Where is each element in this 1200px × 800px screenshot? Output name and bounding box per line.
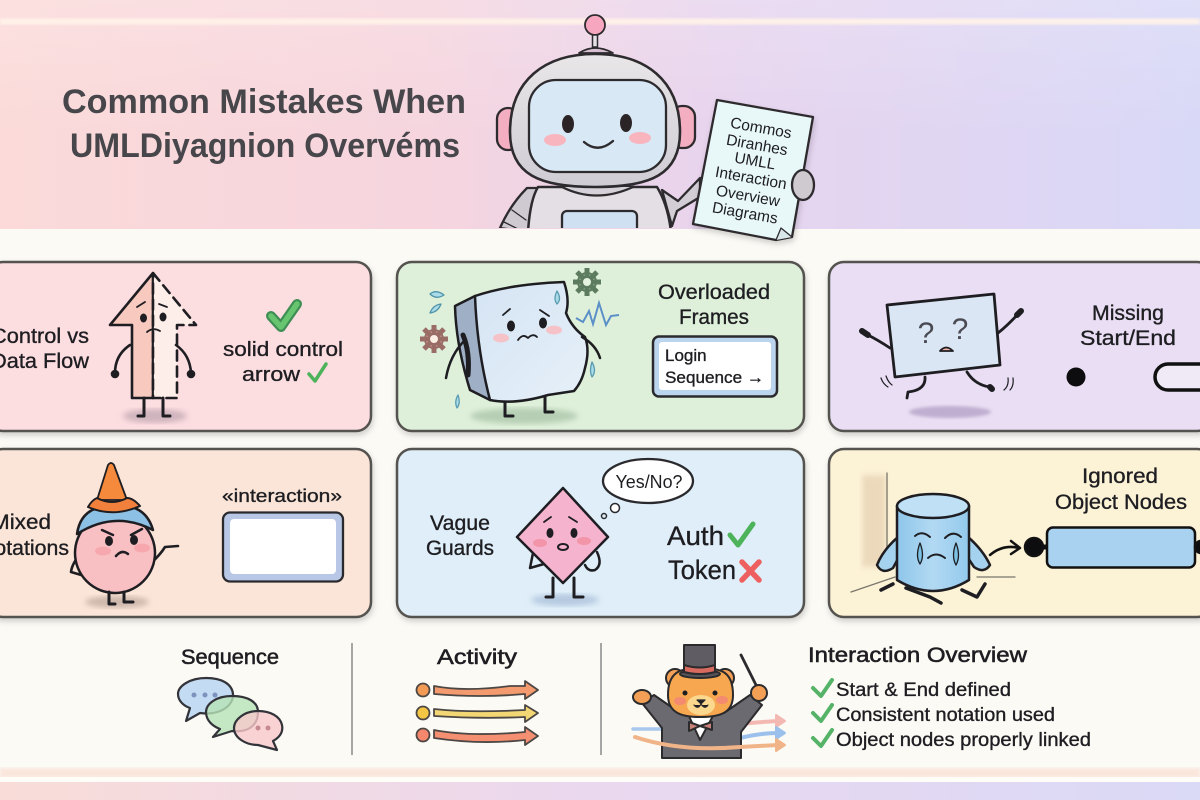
panel text: Ignored Object Nodes: Object Nodes <box>1055 491 1187 514</box>
icon: pulse line <box>576 303 619 325</box>
footer: sequence column <box>178 646 282 750</box>
panel text: Overloaded Frames: Frames <box>679 306 749 329</box>
question marks on the frame: ? <box>952 313 968 346</box>
footer: interaction overview checklist <box>808 644 1091 751</box>
question marks on the frame <box>918 313 968 350</box>
panel: mixed notations <box>0 449 371 617</box>
panel: vague guards <box>397 449 804 617</box>
icon: big green check <box>271 304 297 327</box>
icon: robot mascot holding a paper: Overview <box>715 183 782 211</box>
icon: pink gear <box>420 325 448 353</box>
icon: robot mascot holding a paper: Diagrams <box>711 199 779 228</box>
question marks on the frame: ? <box>918 317 934 350</box>
heading: Interaction Overview: Interaction Overview <box>808 644 1028 667</box>
footer: activity column <box>416 646 538 745</box>
guard: Auth with check: Auth <box>667 521 724 551</box>
panel: missing start/end <box>829 262 1200 431</box>
icon: jumping confused frame <box>862 294 1021 418</box>
icon: crying cylinder in the corner <box>851 473 1015 603</box>
title <box>62 83 466 165</box>
header band <box>0 0 1200 229</box>
annotation: solid control arrow: solid control <box>223 338 343 361</box>
panel text: Overloaded Frames: Overloaded <box>658 281 770 304</box>
icon: robot mascot holding a paper <box>497 15 814 241</box>
panel text: Ignored Object Nodes <box>1055 465 1187 514</box>
thought bubble: Yes/No?: Yes/No? <box>616 472 682 492</box>
icon: robot mascot holding a paper: Diranhes <box>725 132 789 159</box>
thought bubble: Yes/No? <box>602 459 693 518</box>
annotation: solid control arrow <box>223 338 343 386</box>
icon: robot mascot holding a paper: Commos <box>729 115 793 142</box>
icon: worried half-dashed arrow <box>110 273 196 423</box>
icon: worried pink diamond <box>517 488 608 606</box>
item: object nodes properly linked: Object nodes properly linked <box>836 730 1091 751</box>
footer divider <box>351 643 353 755</box>
icon: robot mascot holding a paper: Interaction <box>714 164 788 193</box>
panel text: Control vs Data Flow <box>0 325 90 373</box>
panel text: Overloaded Frames <box>658 281 770 329</box>
icon: conductor bear with baton <box>633 645 785 758</box>
panel: overloaded frames <box>397 262 804 431</box>
panel text: Ignored Object Nodes: Ignored <box>1082 465 1158 488</box>
annotation: solid control arrow: arrow <box>242 363 300 386</box>
object node <box>1025 528 1200 568</box>
panel text: Vague Guards: Guards <box>426 537 494 560</box>
end node <box>1155 364 1200 390</box>
footer divider <box>600 643 602 755</box>
stereotype label: «interaction» <box>222 486 342 506</box>
title: UMLDiyagnion Overvéms <box>70 127 460 165</box>
panel text: Vague Guards: Vague <box>430 512 490 535</box>
item: start and end defined: Start & End defined <box>836 680 1011 701</box>
guard: Token with cross: Token <box>668 555 736 585</box>
panel: ignored object nodes <box>829 449 1200 617</box>
frame: login sequence: Sequence → <box>665 368 764 387</box>
panel text: Mixed Notations <box>0 511 69 560</box>
icon: annoyed ball with traffic cone hat <box>71 463 178 608</box>
icon: three flow arrows <box>416 681 538 745</box>
start node <box>1066 368 1086 386</box>
icon: overlapping speech bubbles <box>178 678 282 750</box>
arrow to object node <box>990 541 1020 555</box>
bottom band <box>0 768 1200 800</box>
title: Common Mistakes When <box>62 83 466 121</box>
frame: login sequence: Login <box>665 346 707 365</box>
item: consistent notation used: Consistent notation used <box>836 705 1055 726</box>
heading: Activity: Activity <box>437 646 518 669</box>
panel text: Missing Start/End: Missing <box>1092 302 1164 325</box>
panel: control vs data flow <box>0 262 371 431</box>
icon: sweating overloaded block <box>430 282 600 424</box>
frame: login sequence <box>653 336 777 396</box>
empty interaction frame <box>223 512 343 582</box>
icon: green gear <box>573 268 601 296</box>
panel text: Vague Guards <box>426 512 494 560</box>
heading: Sequence: Sequence <box>181 646 279 669</box>
icon: robot mascot holding a paper: UMLL <box>733 150 777 174</box>
guard: Auth with check <box>667 521 753 551</box>
panel text: Missing Start/End: Start/End <box>1080 327 1176 350</box>
panel text: Missing Start/End <box>1080 302 1176 350</box>
